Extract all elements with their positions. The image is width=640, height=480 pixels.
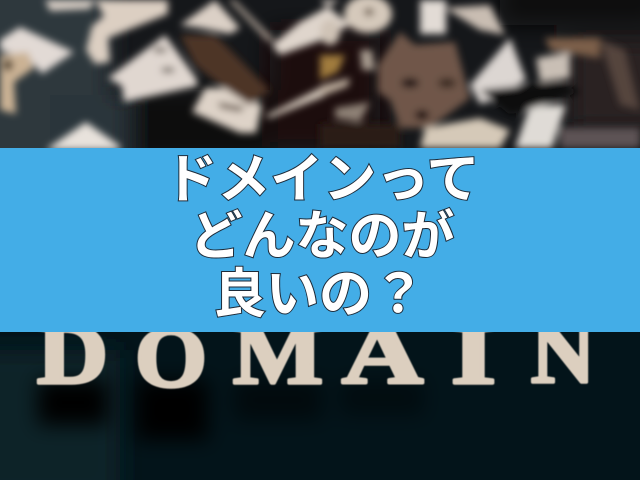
DOMAIN wooden letters — [36, 332, 590, 390]
title text — [164, 150, 480, 324]
board texture glow — [0, 350, 120, 480]
DOMAIN wooden letters: D — [37, 306, 108, 402]
title text: どんなのが — [190, 207, 454, 266]
DOMAIN wooden letters: N — [531, 305, 595, 401]
DOMAIN wooden letters: O — [135, 309, 207, 405]
photo: blurred scattered wooden letters — [0, 0, 640, 148]
DOMAIN wooden letters: I — [451, 306, 496, 402]
title band — [0, 148, 640, 332]
DOMAIN wooden letters: A — [342, 306, 423, 402]
title text: ドメインって — [164, 150, 480, 209]
title text: 良いの？ — [213, 265, 425, 324]
letter shadows — [38, 380, 424, 440]
DOMAIN wooden letters: M — [233, 306, 323, 402]
photo: dark board with DOMAIN wooden letters — [0, 332, 590, 480]
